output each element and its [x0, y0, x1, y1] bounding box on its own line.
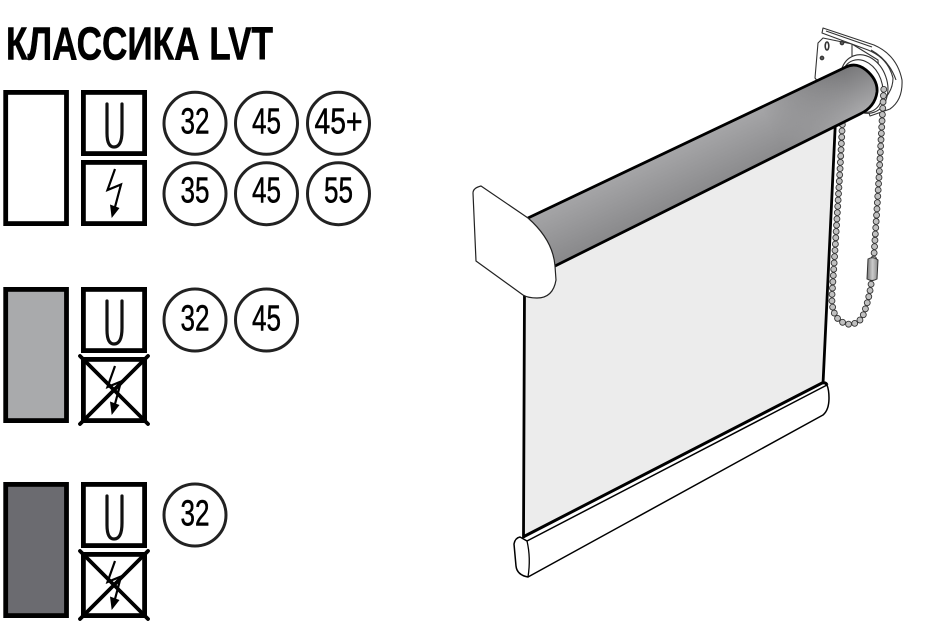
icon: chain control [83, 289, 145, 351]
icon: motor crossed out [80, 356, 148, 424]
badge: 45: 45 [252, 100, 281, 142]
badge: 35 [164, 163, 226, 225]
roller blind illustration [473, 28, 902, 577]
badge: 45: 45 [252, 298, 281, 338]
left end cap [473, 186, 556, 298]
icon: chain control [83, 484, 145, 546]
bead chain [832, 85, 884, 324]
fabric edges [524, 120, 836, 538]
fabric panel [523, 100, 836, 538]
roller tube [528, 65, 877, 266]
badge: 45: 45 [252, 170, 281, 210]
badge: 32 [164, 92, 226, 154]
icon: chain control [83, 92, 145, 154]
mounting bracket [815, 28, 902, 120]
bottom rail [514, 383, 829, 577]
badge: 45 [236, 92, 298, 154]
group: dark grey fabric options [6, 484, 226, 619]
badge: 32 [164, 484, 226, 546]
badge: 45+: 45+ [314, 100, 362, 142]
badge: 55: 55 [324, 170, 353, 210]
badge: 35: 35 [180, 170, 210, 210]
badge: 32: 32 [180, 298, 210, 338]
badge: 32 [164, 289, 226, 351]
group: white fabric options [6, 92, 369, 225]
swatch: white fabric [6, 92, 66, 224]
badge: 32: 32 [180, 492, 210, 534]
icon: motor crossed out [80, 551, 148, 619]
badge: 32: 32 [180, 100, 210, 142]
swatch: dark grey fabric [6, 484, 66, 616]
badge: 45 [236, 289, 298, 351]
group: light grey fabric options [6, 289, 297, 424]
badge: 45+ [308, 92, 370, 154]
badge: 55 [308, 163, 370, 225]
swatch: light grey fabric [6, 289, 66, 421]
badge: 45 [236, 163, 298, 225]
chain connector [867, 258, 878, 280]
icon: motor [83, 162, 145, 224]
title: КЛАССИКА LVT [6, 18, 273, 70]
